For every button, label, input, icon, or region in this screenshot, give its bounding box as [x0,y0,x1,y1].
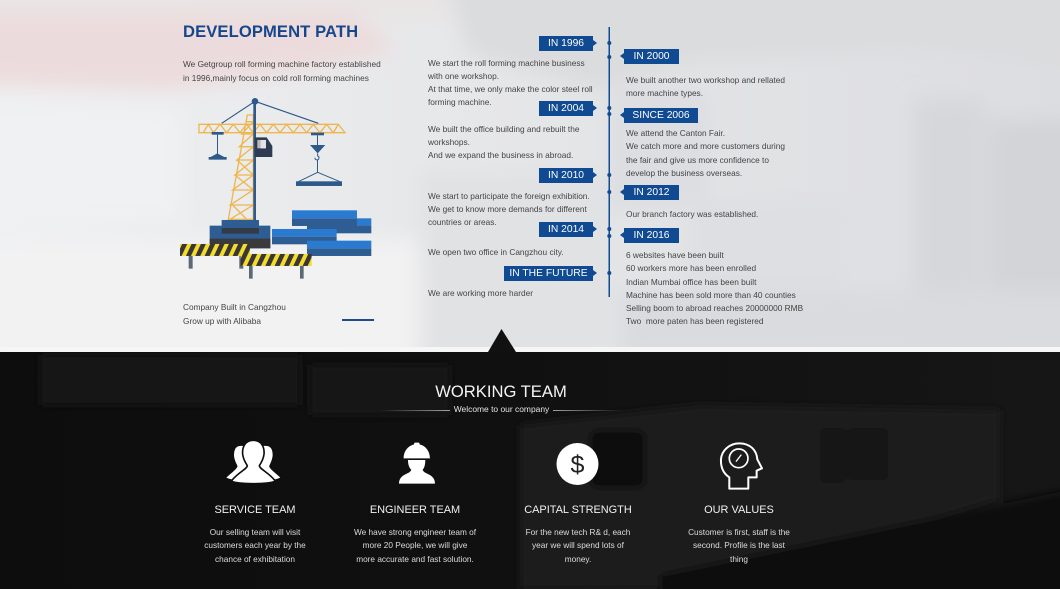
timeline entry: in the future [504,266,593,281]
column: service team [204,504,306,564]
text: since 2006: the fair and give us more confidence to [626,155,769,165]
text block: company introduction: in 1996,mainly focus on cold roll forming machines [183,73,369,83]
text block: company notes: Company Built in Cangzhou [183,302,286,312]
text: our values description [688,528,790,564]
text: in 1996: forming machine. [428,97,492,107]
heading: engineer team: ENGINEER TEAM [370,504,460,516]
text: our values description: Customer is first, staff is the [688,528,790,536]
timeline entry: in 2016: IN 2016 [633,230,670,241]
text: in 1996: At that time, we only make the color steel roll [428,84,593,94]
timeline entry: in 2012 [624,185,679,200]
text: service team description [204,528,306,564]
text: our values description: thing [730,554,748,564]
heading: our values: OUR VALUES [704,504,774,516]
text: in 2016 [626,250,803,326]
heading: development path: DEVELOPMENT PATH [183,22,358,41]
timeline entry: in 2000: IN 2000 [633,51,670,62]
timeline entry: since 2006: SINCE 2006 [632,110,690,120]
heading: capital strength: CAPITAL STRENGTH [524,504,632,516]
text: service team description: chance of exhibitation [215,554,295,564]
timeline entry: in 2010 [539,168,593,183]
text: engineer team description: We have strong engineer team of [354,528,476,536]
timeline entry: in 2012: IN 2012 [633,187,670,198]
timeline entry: in 1996: IN 1996 [548,38,584,49]
text: in the future: We are working more harder [428,288,533,298]
text: in 2010: countries or areas. [428,217,497,227]
text block: company notes: Grow up with Alibaba [183,316,261,326]
text: since 2006: We catch more and more customers during [626,141,785,151]
text: in 2004: We built the office building and rebuilt the [428,124,579,134]
text: in 2010 [428,190,590,227]
timeline entry: in the future: IN THE FUTURE [509,268,588,279]
text: in 2004 [428,124,580,160]
text: in 2012: Our branch factory was established. [626,209,758,219]
icon: capital strength dollar coin: $ [571,451,585,479]
subheading: welcome line: Welcome to our company [454,404,549,414]
text: since 2006: develop the business overseas. [626,168,742,178]
text: in 2016: Two more paten has been registered [626,316,763,326]
text: in 2016: Indian Mumbai office has been built [626,277,756,287]
text: in 2016: Selling boom to abroad reaches 20000000 RMB [626,303,803,313]
text: in 2010: We start to participate the foreign exhibition. [428,190,590,200]
timeline entry: since 2006 [624,108,698,122]
text: in 1996: We start the roll forming machine business [428,58,585,68]
timeline entry: in 2014: IN 2014 [548,224,584,235]
text: in 2016: 60 workers more has been enrolled [626,263,756,273]
timeline entry: in 2004: IN 2004 [548,103,584,114]
timeline entry: in 2016 [624,228,679,243]
text: since 2006 [626,128,785,178]
text: in 2000: more machine types. [626,88,703,98]
text: capital strength description: For the new tech R& d, each [526,528,630,536]
column: capital strength [524,504,632,564]
timeline entry: in 2010: IN 2010 [548,170,584,181]
text: service team description: customers each year by the [204,541,306,550]
text: capital strength description: year we will spend lots of [532,541,624,550]
heading: working team: WORKING TEAM [435,382,567,401]
text: in 2016: Machine has been sold more than 40 counties [626,290,796,300]
text: service team description: Our selling team will visit [210,528,300,536]
text block: company notes [183,302,286,326]
timeline entry: in 2004 [539,101,593,116]
column: our values [688,504,790,564]
text: engineer team description: more accurate and fast solution. [356,554,474,564]
timeline entry: in 2000 [624,49,679,64]
timeline entry: in 1996 [539,36,593,51]
text: in 2004: workshops. [428,137,470,147]
text: in 2004: And we expand the business in abroad. [428,150,573,160]
heading: service team: SERVICE TEAM [214,504,296,516]
text: in 2016: 6 websites have been built [626,250,724,260]
timeline entry: in 2014 [539,222,593,237]
text block: company introduction: We Getgroup roll forming machine factory established [183,59,381,69]
text: since 2006: We attend the Canton Fair. [626,128,725,138]
text: engineer team description [354,528,476,564]
text: in 2014: We open two office in Cangzhou city. [428,246,564,256]
text: in 2000 [626,75,785,98]
text block: company introduction [183,59,381,83]
column: engineer team [354,504,476,564]
text: engineer team description: more 20 People, we will give [363,541,467,550]
text: in 1996 [428,58,593,107]
text: in 2010: We get to know more demands for different [428,204,587,214]
accent line [342,319,374,321]
text: our values description: second. Profile is the last [693,541,785,550]
text: capital strength description: money. [565,554,591,564]
text: capital strength description [526,528,630,564]
text: in 1996: with one workshop. [428,71,499,81]
text: in 2000: We built another two workshop and rellated [626,75,785,85]
